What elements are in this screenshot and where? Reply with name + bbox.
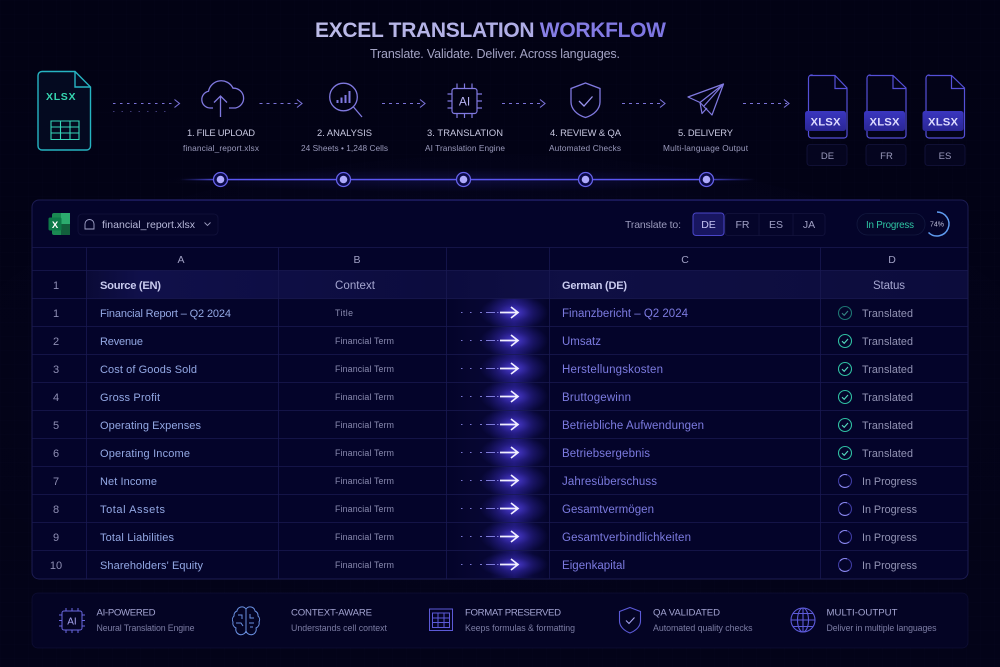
row 5	[53, 418, 913, 432]
feature: AI-powered: Neural Translation Engine	[96, 623, 195, 633]
row 5: Operating Expenses	[100, 420, 202, 432]
row 1	[53, 306, 913, 320]
step detail: AI Translation Engine	[425, 143, 505, 153]
output file: DE: DE	[821, 151, 834, 162]
icon: source XLSX file: XLSX	[46, 91, 76, 103]
feature: multi-output: Deliver in multiple languages	[826, 623, 937, 633]
row 7: Financial Term	[335, 476, 394, 486]
row 1: 1	[53, 308, 59, 320]
arrow: review to delivery	[622, 100, 665, 108]
row 8: Gesamtvermögen	[562, 504, 654, 516]
step label: 1. FILE UPLOAD	[187, 127, 255, 138]
row 3: 3	[53, 364, 59, 376]
row 1: Finanzbericht – Q2 2024	[562, 308, 689, 320]
output file: ES: ES	[939, 151, 951, 162]
icon: shield check	[571, 83, 600, 118]
language selector: JA	[803, 219, 815, 231]
row 3	[53, 362, 913, 376]
icon: brain	[232, 607, 260, 635]
row 8	[53, 502, 918, 516]
translate-to label: Translate to:	[625, 219, 681, 231]
language selector: DE	[701, 219, 716, 231]
output file: ES	[922, 75, 965, 166]
step detail: financial_report.xlsx	[183, 143, 260, 153]
row 2: Translated	[862, 336, 913, 348]
progress timeline	[163, 168, 763, 192]
row 4: Bruttogewinn	[562, 392, 631, 404]
output file: ES: XLSX	[928, 116, 958, 128]
step 5: delivery	[663, 84, 749, 153]
arrow: file to upload	[113, 100, 180, 112]
row 2: Revenue	[100, 336, 143, 348]
row 6: Betriebsergebnis	[562, 448, 650, 460]
step label: 3. TRANSLATION	[427, 127, 503, 138]
feature: AI-powered: AI-POWERED	[96, 608, 156, 618]
row 10	[50, 558, 918, 572]
icon: globe	[791, 608, 815, 632]
subtitle: Translate. Validate. Deliver. Across languages.	[370, 47, 620, 61]
row 8: 8	[53, 504, 59, 516]
icon: Excel logo	[48, 213, 70, 235]
arrow: analysis to translation	[382, 100, 425, 108]
row 3: Herstellungskosten	[562, 364, 663, 376]
status pill: In Progress	[866, 220, 914, 231]
row 4: Gross Profit	[100, 392, 160, 404]
row 4: 4	[53, 392, 59, 404]
row 1: Title	[335, 308, 353, 318]
panel: feature bar	[32, 593, 968, 648]
row 4: Financial Term	[335, 392, 394, 402]
row 9: Gesamtverbindlichkeiten	[562, 532, 691, 544]
row 1: Financial Report – Q2 2024	[100, 308, 231, 320]
table header row: 1	[53, 280, 59, 292]
progress ring 74%	[928, 212, 949, 236]
row 3: Cost of Goods Sold	[100, 364, 197, 376]
column letter row: A	[177, 254, 185, 266]
step label: 4. REVIEW & QA	[550, 127, 622, 138]
step 4: review and QA	[549, 83, 622, 153]
row 2: Umsatz	[562, 336, 601, 348]
feature: context-aware	[232, 607, 388, 635]
row 8: Financial Term	[335, 504, 394, 514]
feature: format preserved	[430, 608, 575, 633]
arrow: delivery to outputs	[743, 100, 789, 108]
row 8: In Progress	[862, 504, 918, 516]
arrow: translation to review	[502, 100, 545, 108]
feature: format preserved: FORMAT PRESERVED	[465, 608, 561, 618]
file selector	[78, 214, 218, 235]
row 9: Financial Term	[335, 532, 394, 542]
row 5: Betriebliche Aufwendungen	[562, 420, 704, 432]
table header row: Status	[873, 280, 905, 292]
row 4	[53, 390, 913, 404]
row 10: 10	[50, 560, 62, 572]
icon: source XLSX file	[38, 72, 90, 150]
row 7: In Progress	[862, 476, 918, 488]
icon: AI chip	[59, 608, 85, 633]
row 9: In Progress	[862, 532, 918, 544]
row 10: Financial Term	[335, 560, 394, 570]
row 10: In Progress	[862, 560, 918, 572]
row 7: 7	[53, 476, 59, 488]
icon: shield check	[620, 608, 640, 633]
language selector: FR	[736, 219, 750, 231]
language selector: ES	[769, 219, 783, 231]
feature: AI-powered: AI	[67, 616, 77, 628]
row 2	[53, 334, 913, 348]
row 7	[53, 474, 918, 488]
progress ring 74%: 74%	[930, 222, 944, 228]
table header row	[53, 270, 968, 298]
row 3: Translated	[862, 364, 913, 376]
status pill	[857, 214, 925, 235]
row 4: Translated	[862, 392, 913, 404]
table header row: Source (EN)	[100, 280, 161, 292]
step 3: translation	[425, 84, 505, 153]
row 10: Eigenkapital	[562, 560, 625, 572]
row 1: Translated	[862, 308, 913, 320]
step 3: translation: AI	[459, 94, 470, 108]
row 7: Jahresüberschuss	[562, 476, 657, 488]
feature: QA validated	[620, 608, 753, 633]
icon: paper plane	[688, 84, 724, 115]
arrow: upload to analysis	[260, 100, 302, 108]
step label: 2. ANALYSIS	[317, 127, 372, 138]
row 6	[53, 446, 913, 460]
step detail: Multi-language Output	[663, 143, 749, 153]
row 9: Total Liabilities	[100, 532, 174, 544]
icon: magnifier chart	[330, 83, 362, 117]
language selector	[693, 213, 825, 236]
table header row: Context	[335, 280, 376, 292]
feature: multi-output	[791, 608, 937, 633]
output file: FR	[864, 75, 906, 166]
title: EXCEL TRANSLATION WORKFLOW	[315, 19, 666, 42]
row 6: Operating Income	[100, 448, 190, 460]
icon: cloud upload	[202, 81, 244, 117]
icon: Excel logo: X	[52, 220, 59, 231]
step detail: Automated Checks	[549, 143, 621, 153]
row 9: 9	[53, 532, 59, 544]
column letter row: B	[353, 254, 361, 266]
icon: grid	[430, 609, 452, 630]
feature: context-aware: Understands cell context	[291, 623, 388, 633]
column letter row	[33, 248, 967, 270]
output file: FR: FR	[880, 151, 893, 162]
column letter row: D	[888, 254, 896, 266]
toolbar	[48, 212, 949, 236]
row 2: Financial Term	[335, 336, 394, 346]
row 8: Total Assets	[100, 504, 166, 516]
column letter row: C	[681, 254, 689, 266]
row 3: Financial Term	[335, 364, 394, 374]
row 5: Financial Term	[335, 420, 394, 430]
table header row: German (DE)	[562, 280, 627, 292]
icon: AI chip	[448, 84, 482, 118]
row 6: 6	[53, 448, 59, 460]
step 2: analysis	[301, 83, 388, 153]
translation glow band	[447, 296, 549, 578]
feature: QA validated: QA VALIDATED	[653, 608, 720, 618]
row 6: Translated	[862, 448, 913, 460]
row 6: Financial Term	[335, 448, 394, 458]
output file: DE	[805, 75, 847, 166]
step detail: 24 Sheets • 1,248 Cells	[301, 143, 388, 153]
row 9	[53, 530, 918, 544]
row 5: Translated	[862, 420, 913, 432]
row 7: Net Income	[100, 476, 157, 488]
feature: multi-output: MULTI-OUTPUT	[826, 608, 898, 618]
row 10: Shareholders' Equity	[100, 560, 204, 572]
output file: DE: XLSX	[810, 116, 841, 128]
step 1: file upload	[183, 81, 260, 153]
row 2: 2	[53, 336, 59, 348]
file selector: financial_report.xlsx	[102, 219, 196, 231]
feature: QA validated: Automated quality checks	[653, 623, 753, 633]
table grid lines	[32, 248, 968, 579]
panel: spreadsheet	[32, 200, 968, 579]
feature: format preserved: Keeps formulas & formatting	[465, 623, 575, 633]
feature: AI-powered	[59, 608, 195, 633]
row 5: 5	[53, 420, 59, 432]
output file: FR: XLSX	[870, 116, 900, 128]
step label: 5. DELIVERY	[678, 127, 734, 138]
feature: context-aware: CONTEXT-AWARE	[291, 608, 372, 618]
